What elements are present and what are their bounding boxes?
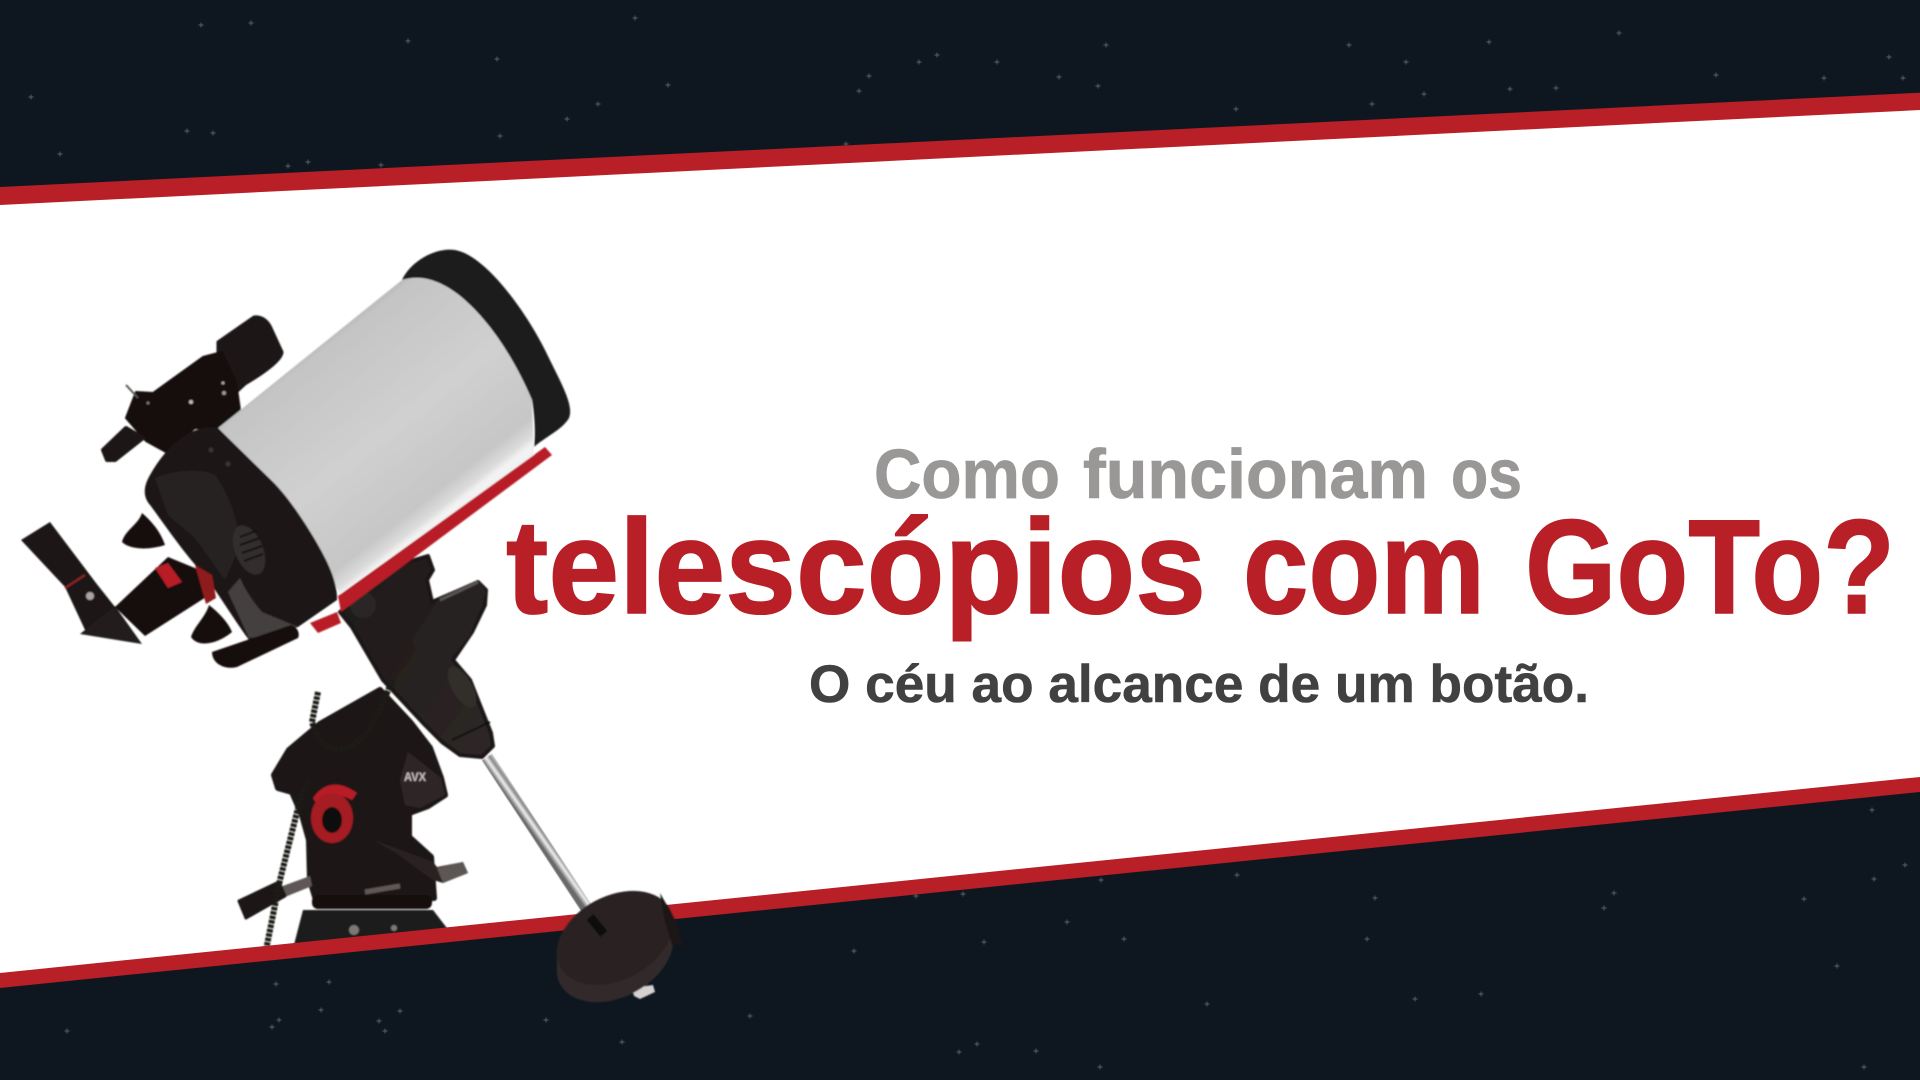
mount: dovetail clamp and upper axis [340,556,493,757]
title line 2: telescópios [506,493,1206,642]
title line 1 [874,435,1522,513]
subtitle: O céu ao alcance de um botão. [809,655,1589,714]
star diagonal and eyepiece [21,522,216,644]
telescope: upper assembly and mount [21,250,570,960]
lower red band and dark foreground [0,777,1920,1080]
red dovetail bar [310,447,552,633]
title line 2: com [1243,493,1485,642]
title line 2 [506,493,1895,642]
star field: upper sky [28,16,1906,168]
front corrector ring [402,250,570,447]
rear cell [145,427,337,640]
counterweight [541,872,689,1021]
upper red band [0,93,1920,205]
mount: motor housing and base [274,690,468,960]
red polar axis ring [311,785,357,843]
title line 1: funcionam [1083,435,1428,513]
finder scope [103,317,282,460]
hand controller cable [266,680,392,950]
counterweight shaft [487,757,591,915]
title line 1: Como [874,435,1060,513]
title line 1: os [1451,435,1522,513]
knobs [122,513,299,668]
slow-motion handle [239,876,312,918]
optical tube: silver body [218,278,534,594]
mount: motor housing and base: AVX [404,770,426,784]
